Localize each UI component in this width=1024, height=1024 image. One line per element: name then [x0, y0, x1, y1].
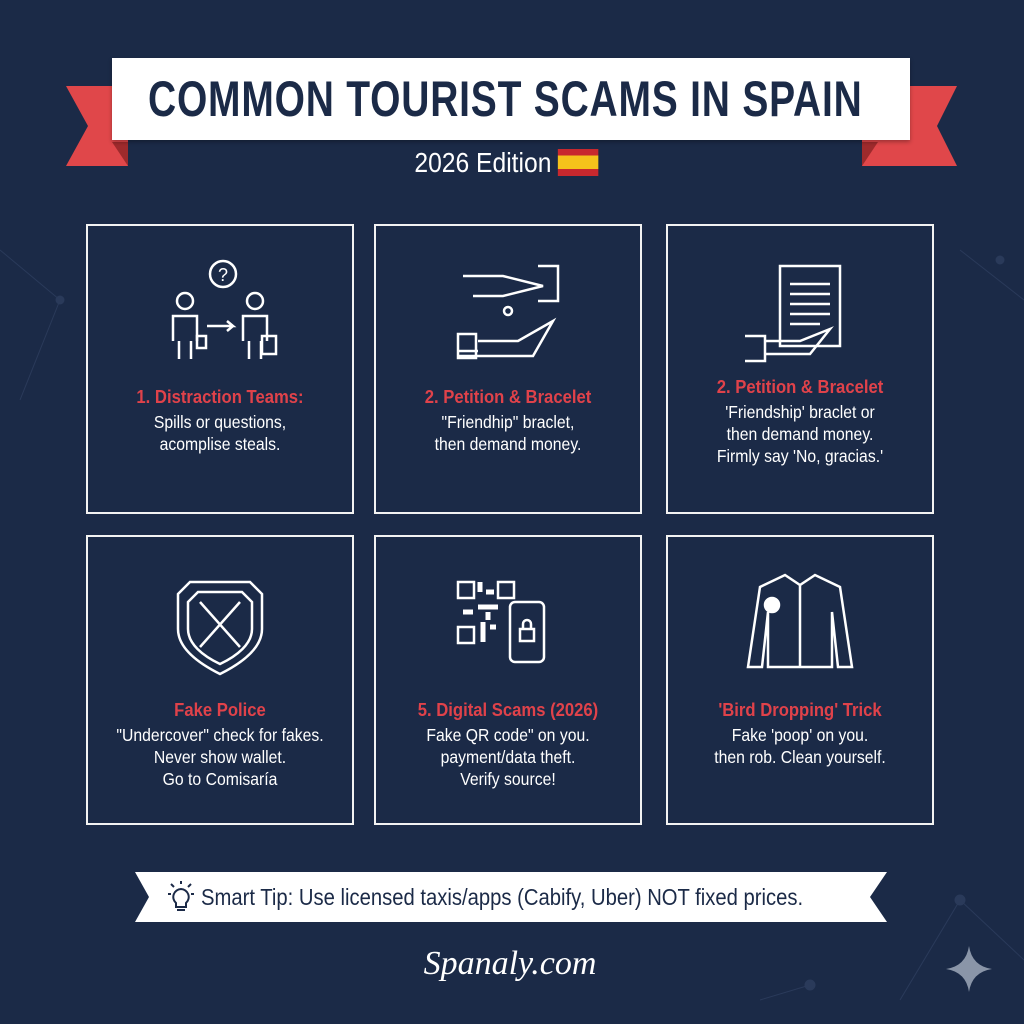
panel: petition 2: then demand money.: [727, 424, 873, 444]
panel: fake police: Fake Police: [174, 699, 266, 720]
icon: hands: [456, 264, 560, 360]
panel: digital scams: Fake QR code" on you.: [426, 725, 590, 745]
footer brand: Spanaly.com: [424, 945, 596, 982]
panel: petition 2: 'Friendship' braclet or: [725, 402, 875, 422]
panel: fake police: Never show wallet.: [154, 747, 286, 767]
icon: sparkle: [946, 946, 992, 992]
panel: bird dropping: Fake 'poop' on you.: [732, 725, 868, 745]
icon: bulb: [168, 881, 194, 911]
title: COMMON TOURIST SCAMS IN SPAIN: [148, 71, 863, 127]
panel: digital scams: [374, 535, 642, 825]
panel: fake police: [86, 535, 354, 825]
ribbon right: [862, 86, 957, 166]
icon: shield: [176, 580, 264, 676]
panel: fake police: "Undercover" check for fakes.: [116, 725, 324, 745]
panel: petition bracelet: [374, 224, 642, 514]
icon: people: ?: [218, 265, 228, 285]
panel: digital scams: Verify source!: [460, 769, 556, 789]
panel: distraction teams: [86, 224, 354, 514]
panel: distraction teams: acomplise steals.: [160, 434, 280, 454]
callout: smart tip: [135, 872, 887, 922]
ribbon left: [66, 86, 128, 166]
icon: shirt: [746, 574, 854, 668]
panel: digital scams: 5. Digital Scams (2026): [418, 699, 598, 720]
panel: digital scams: payment/data theft.: [441, 747, 575, 767]
panel: bird dropping: [666, 535, 934, 825]
icon: clipboard: [745, 264, 842, 362]
panel: fake police: Go to Comisaría: [163, 769, 277, 789]
panel: petition 2: Firmly say 'No, gracias.': [717, 446, 883, 466]
panel: petition 2: 2. Petition & Bracelet: [717, 376, 883, 397]
callout: smart tip: Smart Tip: Use licensed taxis/apps (Cabify, Uber) NOT fixed prices.: [201, 884, 803, 910]
icon: QR phone: [456, 580, 546, 664]
panel: petition bracelet: then demand money.: [435, 434, 581, 454]
icon: people: [172, 260, 278, 359]
panel: distraction teams: Spills or questions,: [154, 412, 286, 432]
panel: petition 2: [666, 224, 934, 514]
panel: petition bracelet: "Friendhip" braclet,: [442, 412, 574, 432]
panel: distraction teams: 1. Distraction Teams:: [136, 386, 304, 407]
subtitle: 2026 Edition: [414, 147, 551, 178]
title banner: [66, 58, 957, 178]
panel: petition bracelet: 2. Petition & Bracelet: [425, 386, 591, 407]
panel: bird dropping: then rob. Clean yourself.: [714, 747, 886, 767]
panel: bird dropping: 'Bird Dropping' Trick: [718, 699, 882, 720]
